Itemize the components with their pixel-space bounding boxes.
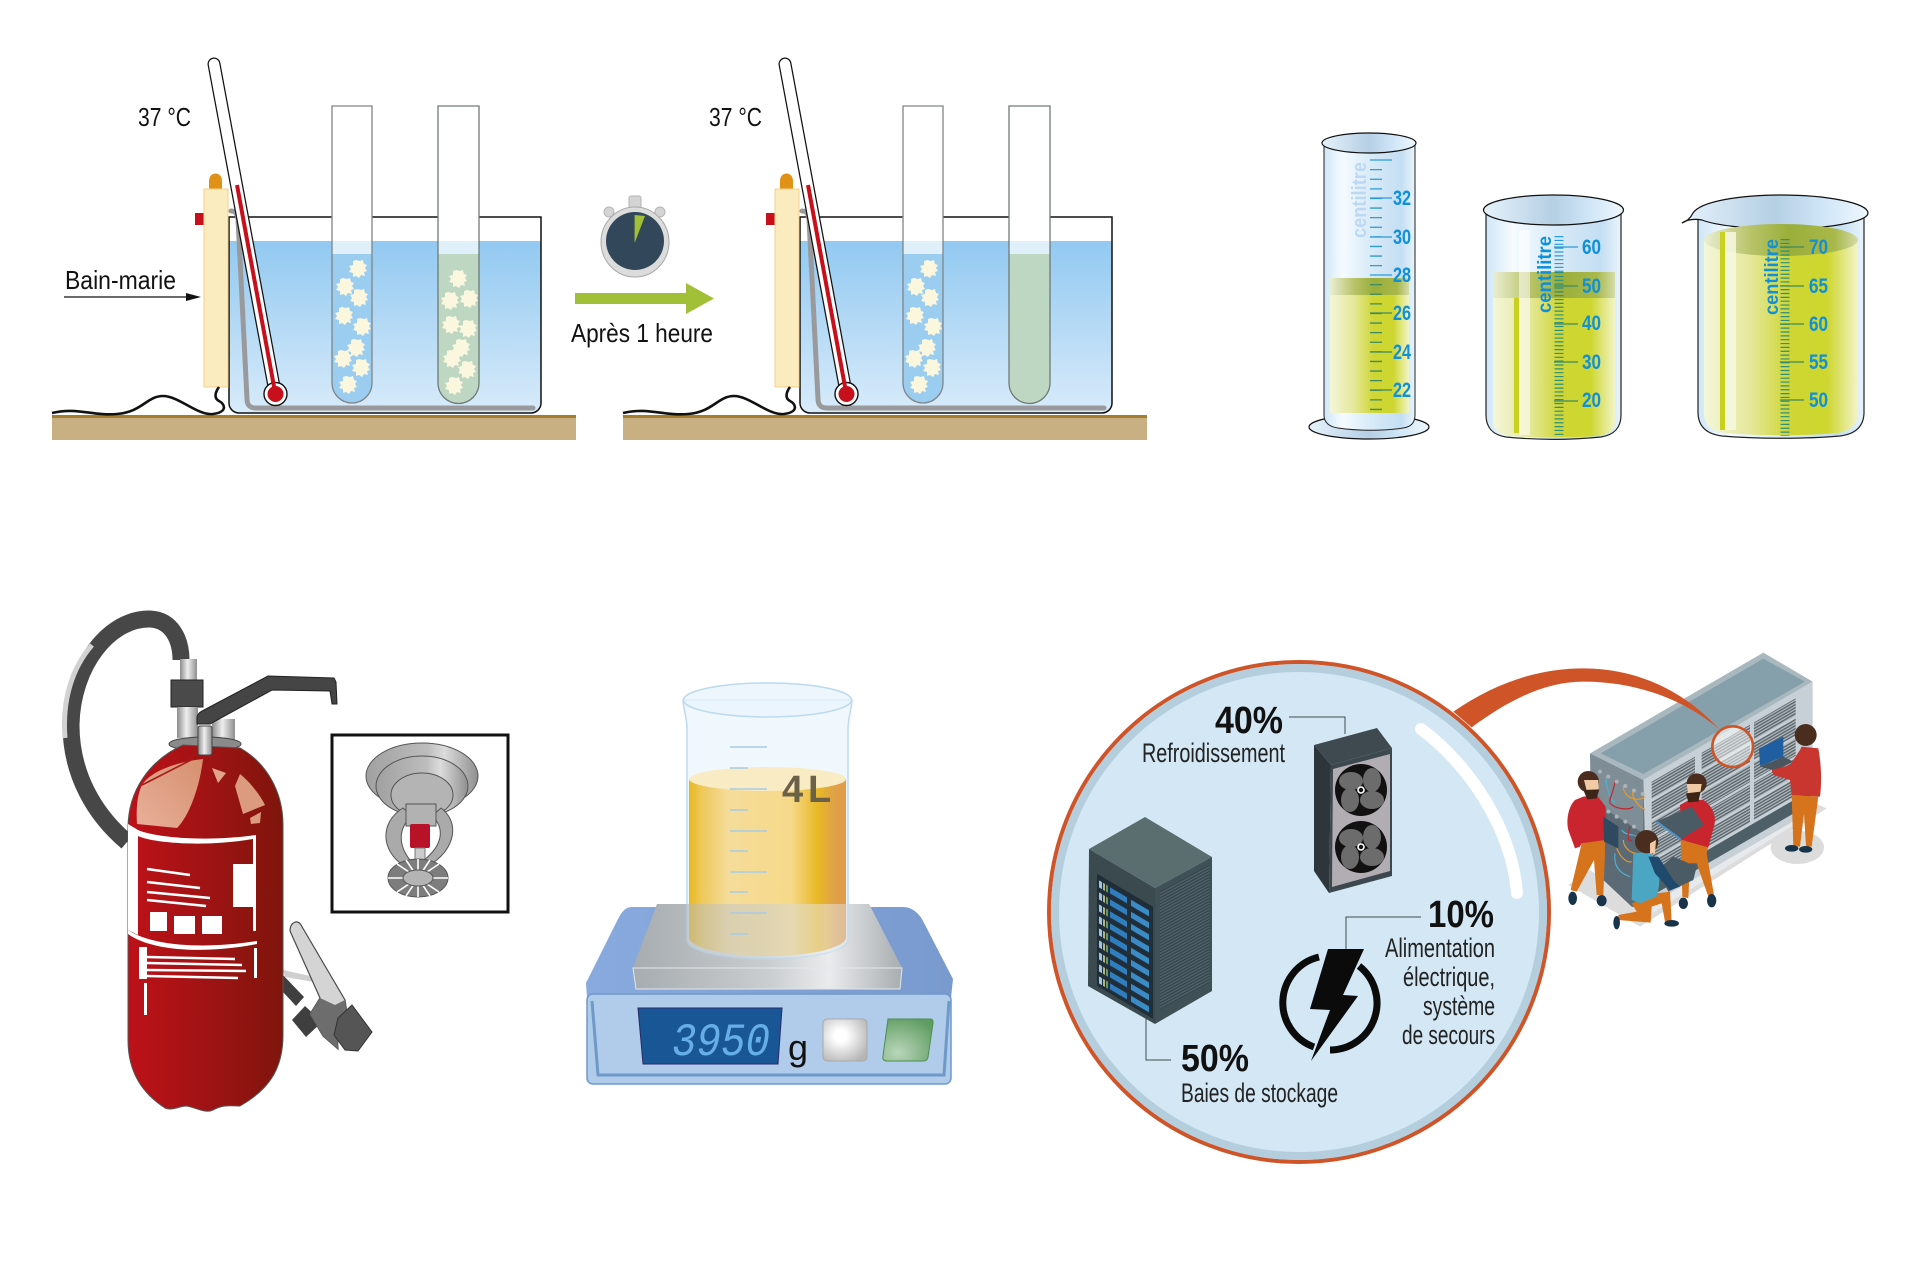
test tube with enzyme flakes <box>332 106 372 403</box>
inset frame <box>332 735 508 912</box>
beaker meniscus band <box>1493 272 1615 298</box>
test tube with flakes <box>903 106 943 403</box>
server grills <box>1643 690 1810 901</box>
arrow <box>575 283 714 314</box>
panel: server room scene <box>1453 653 1827 929</box>
power label: électrique, <box>1403 962 1495 992</box>
temperature label: 37 °C <box>709 102 762 132</box>
panel: tall beaker <box>1484 195 1624 439</box>
panel: elapsed time <box>571 196 714 348</box>
liquid surface <box>1704 224 1858 256</box>
icon: cooling unit <box>1314 728 1392 893</box>
oil in beaker <box>689 779 846 956</box>
beaker scale: 20 <box>1582 389 1601 412</box>
table <box>52 415 576 440</box>
power leader line <box>1346 917 1421 950</box>
bain-marie label and arrow: Bain-marie <box>65 265 176 295</box>
cooling label: Refroidissement <box>1142 738 1285 768</box>
beaker rim <box>1484 195 1624 225</box>
oil surface <box>689 767 846 791</box>
outlet cylinder <box>198 726 212 755</box>
cylinder scale <box>1349 160 1411 412</box>
beaker glass <box>683 700 852 959</box>
hose highlight <box>64 645 92 738</box>
hose <box>71 619 181 842</box>
body reflections <box>137 759 265 828</box>
power label <box>1385 933 1495 1050</box>
power cable <box>623 387 795 414</box>
glass reflection <box>1720 232 1736 430</box>
cooling leader line <box>1289 717 1345 734</box>
cylinder rim <box>1322 133 1416 153</box>
cylinder scale: 26 <box>1393 302 1411 325</box>
power label: de secours <box>1402 1020 1495 1050</box>
server plinth <box>1643 803 1813 917</box>
beaker glass <box>1486 210 1621 439</box>
spouted beaker scale: 60 <box>1809 313 1828 336</box>
beaker graduations <box>730 747 767 934</box>
cylinder scale: 24 <box>1393 341 1411 364</box>
digital display: 3950 <box>672 1017 770 1069</box>
test tube with green liquid and flakes <box>438 106 479 404</box>
circle <box>1049 662 1549 1162</box>
panel: sprinkler inset <box>332 735 508 912</box>
beaker scale: 30 <box>1582 351 1601 374</box>
thermometer <box>214 64 287 406</box>
glass highlight <box>1421 729 1517 893</box>
beaker liquid <box>1493 298 1615 438</box>
volume label: 4 <box>782 769 803 811</box>
temperature label: 37 °C <box>138 102 191 132</box>
spouted beaker scale: centilitre <box>1762 239 1783 315</box>
panel: scale with beaker <box>586 683 953 1084</box>
body label <box>128 824 257 1015</box>
person: centre technician with server unit <box>1656 773 1716 909</box>
cylinder scale: 32 <box>1393 187 1411 210</box>
spouted beaker glass <box>1698 212 1864 438</box>
power cable <box>52 387 224 414</box>
scale body <box>586 907 953 998</box>
power label: Alimentation <box>1385 933 1495 963</box>
icon: storage rack <box>1088 817 1212 1024</box>
handle <box>197 676 337 724</box>
heater <box>195 174 228 387</box>
heating tube <box>802 211 1104 408</box>
duration label: Après 1 heure <box>571 318 713 348</box>
digital display <box>638 1008 782 1069</box>
connector arc <box>1453 668 1719 729</box>
cylinder scale: 28 <box>1393 264 1411 287</box>
weighing tray <box>633 904 902 989</box>
person: left technician <box>1567 771 1618 906</box>
volume label: L <box>808 769 831 811</box>
white button <box>823 1019 867 1061</box>
sprinkler head <box>366 743 478 897</box>
icon: power bolt <box>1283 949 1377 1061</box>
cylinder glass <box>1324 143 1415 430</box>
server right face <box>1643 682 1813 909</box>
spouted beaker liquid <box>1704 240 1858 435</box>
nozzle assembly at hose end <box>169 659 241 751</box>
panel: water bath before <box>52 64 576 440</box>
person: kneeling technician <box>1613 830 1697 929</box>
power label: système <box>1423 991 1495 1021</box>
spouted beaker scale: 55 <box>1809 351 1828 374</box>
lower nozzle <box>283 922 372 1051</box>
icon: stopwatch <box>601 196 669 277</box>
beaker scale <box>1535 236 1601 436</box>
power percentage: 10% <box>1428 894 1494 936</box>
storage percentage: 50% <box>1181 1038 1249 1080</box>
cooling percentage: 40% <box>1215 700 1283 742</box>
cylinder meniscus band <box>1330 278 1409 295</box>
panel: data centre magnifier <box>1049 662 1549 1162</box>
heating tube <box>231 211 533 408</box>
cylinder base <box>1309 415 1429 439</box>
panel: water bath after <box>623 64 1147 440</box>
beaker scale: centilitre <box>1535 236 1556 313</box>
person: right technician with laptop <box>1759 724 1821 853</box>
test tube with digested green liquid <box>1009 106 1050 404</box>
beaker rim <box>684 683 852 717</box>
cylinder liquid <box>1330 295 1409 413</box>
spouted beaker scale <box>1762 236 1828 436</box>
cylinder scale: 30 <box>1393 226 1411 249</box>
connector ring on server <box>1712 726 1753 767</box>
tank with water <box>229 217 541 413</box>
spouted beaker scale: 65 <box>1809 275 1828 298</box>
beaker scale: 60 <box>1582 236 1601 259</box>
table <box>623 415 1147 440</box>
panel: fire extinguisher <box>64 619 372 1111</box>
spouted beaker scale: 70 <box>1809 236 1828 259</box>
beaker scale: 50 <box>1582 275 1601 298</box>
extinguisher body <box>128 745 283 1111</box>
cylinder scale: centilitre <box>1349 162 1371 238</box>
panel: graduated cylinder <box>1309 133 1429 439</box>
scale front panel <box>587 994 951 1084</box>
storage leader line <box>1146 1019 1171 1060</box>
floor shadows <box>1568 800 1827 927</box>
tank with water <box>800 217 1112 413</box>
beaker rim and spout <box>1682 195 1868 229</box>
beaker scale: 40 <box>1582 312 1601 335</box>
heater <box>766 174 799 387</box>
tray overlay <box>633 904 902 989</box>
spouted beaker scale: 50 <box>1809 389 1828 412</box>
storage label: Baies de stockage <box>1181 1078 1338 1108</box>
gram unit: g <box>788 1027 808 1068</box>
cylinder scale: 22 <box>1393 379 1411 402</box>
panel: spouted beaker <box>1682 195 1868 438</box>
glass reflection <box>1514 230 1530 435</box>
server left face with cables <box>1590 753 1647 910</box>
server top <box>1590 653 1813 780</box>
green button <box>883 1019 933 1061</box>
thermometer <box>785 64 858 406</box>
